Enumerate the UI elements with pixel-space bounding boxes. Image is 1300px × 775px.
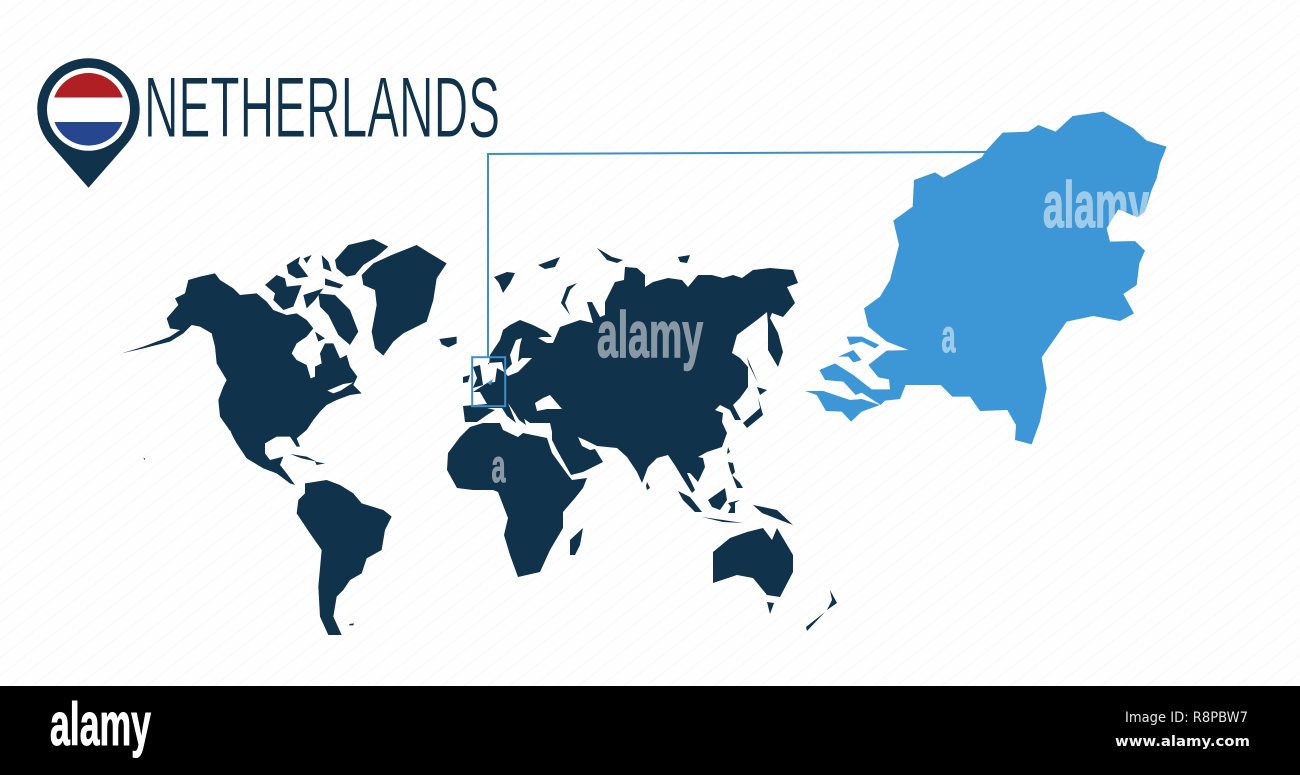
franz josef land	[538, 257, 560, 269]
baffin island	[318, 293, 358, 345]
baltic sea	[504, 338, 532, 376]
watermark: africa letter: a	[492, 440, 506, 492]
queen elizabeth islands	[287, 255, 343, 288]
victoria island	[265, 275, 302, 310]
britain	[473, 365, 483, 388]
image id: Image ID: R8PBW7	[1125, 710, 1248, 726]
south america	[297, 480, 392, 635]
greenland	[362, 245, 447, 356]
tasmania	[767, 602, 774, 614]
java	[702, 517, 743, 523]
baja california gulf	[228, 430, 239, 452]
locator marker: netherlands on world map	[487, 379, 493, 385]
title: NETHERLANDS	[144, 60, 500, 156]
black sea	[535, 395, 562, 411]
watermark: netherlands letter: a	[942, 310, 956, 362]
africa	[447, 423, 587, 577]
caribbean	[290, 454, 317, 462]
world map	[122, 239, 837, 635]
north and south america	[122, 273, 392, 635]
falklands and hawaii	[143, 458, 354, 625]
locator box and connector line	[472, 152, 988, 406]
website: www.alamy.com	[1115, 734, 1250, 750]
zeeland north islands	[838, 337, 879, 362]
new siberian islands	[678, 255, 690, 263]
zeeland south island	[805, 391, 880, 422]
netherlands enlarged map	[805, 112, 1167, 444]
iceland	[439, 337, 457, 347]
madagascar	[570, 528, 583, 555]
sakhalin hokkaido japan	[743, 357, 767, 428]
philippines and taiwan	[727, 447, 743, 488]
watermark: netherlands alamy: alamy	[1043, 168, 1149, 241]
borneo	[708, 488, 727, 510]
somerset and southampton	[303, 288, 325, 342]
arctic canada and greenland	[265, 239, 457, 356]
eurasia	[463, 267, 798, 493]
flag	[54, 73, 123, 146]
sri lanka	[646, 482, 650, 490]
new zealand	[806, 590, 837, 631]
north america	[122, 273, 362, 485]
footer logo: alamy	[50, 691, 151, 758]
watermark: map alamy: alamy	[597, 298, 703, 371]
severnaya zemlya	[597, 248, 623, 263]
new guinea	[753, 505, 793, 525]
sulawesi	[728, 500, 740, 513]
pin white ring	[47, 68, 130, 151]
footer bar	[0, 686, 1300, 775]
ireland	[463, 375, 470, 383]
map pin with dutch flag	[37, 58, 140, 188]
netherlands mainland	[819, 112, 1167, 444]
svalbard	[494, 272, 515, 293]
ellesmere island	[335, 239, 388, 277]
australia	[713, 528, 793, 597]
pin body	[37, 58, 140, 188]
novaya zemlya	[561, 283, 577, 315]
sumatra	[678, 491, 702, 512]
gulf of st lawrence	[327, 382, 353, 393]
